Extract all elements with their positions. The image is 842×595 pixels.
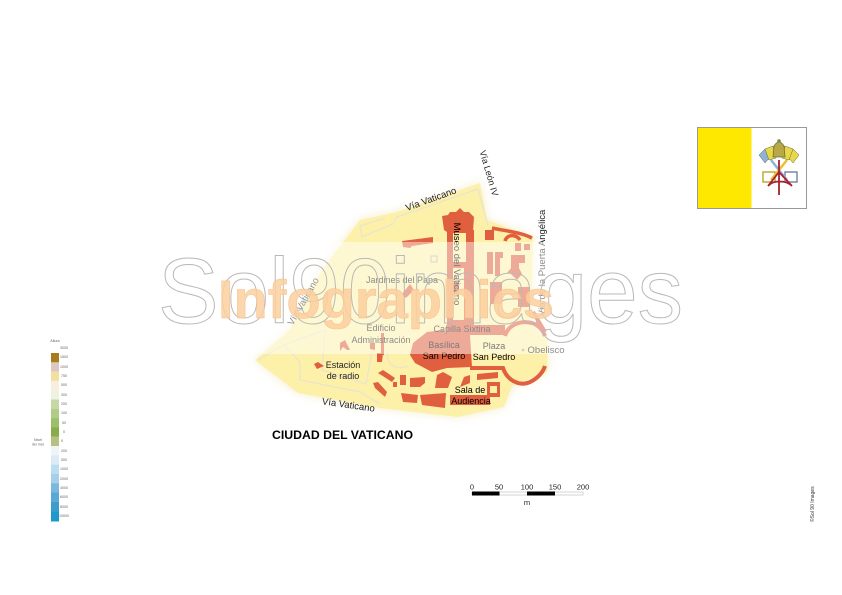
legend values: 8000 (60, 505, 68, 509)
icon: papal emblem (759, 139, 799, 195)
label: Museo del Vaticano: Museo del Vaticano (451, 223, 462, 305)
elevation legend (32, 339, 69, 522)
scale bar: 50 (495, 482, 503, 492)
scale bar: 150 (549, 482, 561, 492)
legend values: 100 (61, 411, 67, 415)
legend values: 200 (61, 449, 67, 453)
label: Capilla Sixtina: Capilla Sixtina (433, 324, 491, 334)
legend values: 1000 (60, 365, 68, 369)
label: Sala de Audiencia: Audiencia (451, 396, 491, 406)
legend values: 300 (61, 393, 67, 397)
legend values: 6000 (60, 495, 68, 499)
label: Jardines del Papa: Jardines del Papa (366, 275, 438, 285)
street label: Via Leon IV: Vía León IV (478, 149, 500, 197)
sea level note: Nivel (34, 438, 42, 442)
flag of Vatican City (698, 128, 806, 208)
legend values: 50 (62, 421, 66, 425)
Vatican buildings (314, 208, 545, 408)
map: Vatican City (255, 149, 564, 417)
credit: ©Sol 90 Images (809, 486, 816, 522)
street label: Via Vaticano south: Vía Vaticano (321, 396, 375, 415)
label: Estacion de radio: Estación (326, 360, 360, 370)
street label: Viale de la Puerta Angelica: Vía de la Puerta Angélica (537, 209, 548, 316)
street label: Via Vaticano north: Vía Vaticano (404, 185, 458, 214)
legend values: 750 (61, 374, 67, 378)
label: Edificio Administracion: Administración (351, 335, 411, 345)
label: Sala de Audiencia: Sala de (455, 385, 485, 395)
legend values: 200 (61, 402, 67, 406)
legend values: 4000 (60, 486, 68, 490)
label: Obelisco: Obelisco (528, 345, 564, 356)
sea level note: del mar (32, 442, 45, 446)
legend values: 0 (63, 430, 65, 434)
scale bar: 100 (521, 482, 533, 492)
legend values: 2000 (60, 477, 68, 481)
legend color ramp (51, 353, 59, 522)
watermark: Sol90images: Infographics (218, 270, 554, 330)
label: Plaza San Pedro: Plaza (483, 341, 505, 351)
label: Basilica San Pedro: San Pedro (423, 351, 465, 361)
title: CIUDAD DEL VATICANO (272, 428, 413, 442)
label: Plaza San Pedro: San Pedro (473, 352, 515, 362)
street label: Via west: Vía Vaticano (286, 276, 322, 328)
legend values: 0 (61, 439, 63, 443)
scale bar (470, 482, 589, 507)
legend values: 3000 (60, 346, 68, 350)
legend values: 500 (61, 458, 67, 462)
scale bar: 0 (470, 482, 474, 492)
legend values: 1000 (60, 467, 68, 471)
scale bar: 200 (577, 482, 589, 492)
legend values: 1500 (60, 355, 68, 359)
scale bar: m (524, 498, 530, 507)
label: Estacion de radio: de radio (327, 371, 359, 381)
label: Edificio Administracion: Edificio (366, 323, 396, 333)
map territory (255, 183, 548, 417)
label: Basilica San Pedro: Basílica (428, 340, 460, 350)
watermark: Sol90images: Sol90images (158, 239, 683, 343)
legend values (59, 346, 69, 518)
legend heading: Altura (50, 339, 60, 343)
legend values: 10000 (59, 514, 69, 518)
legend values: 500 (61, 383, 67, 387)
